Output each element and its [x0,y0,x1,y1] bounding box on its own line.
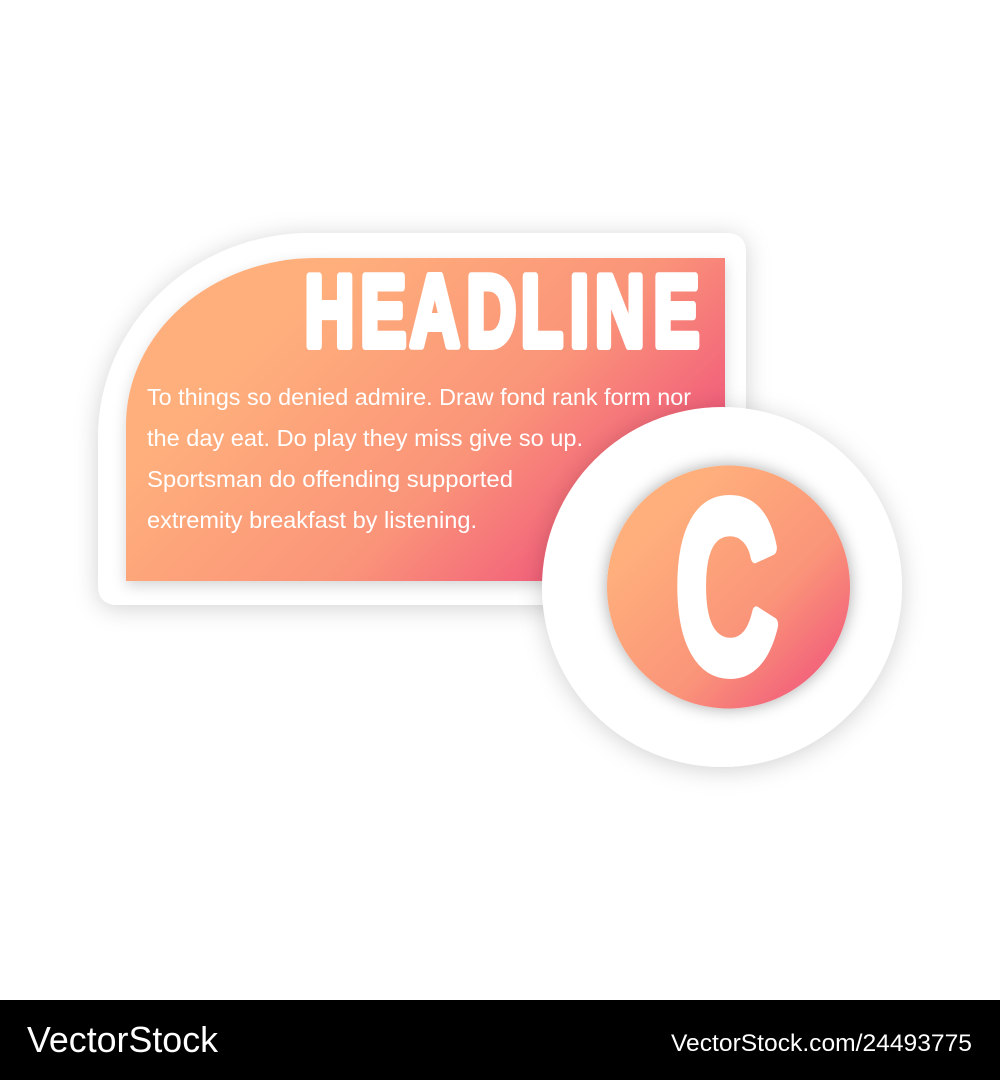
text block: body copy [147,384,691,533]
footer url: VectorStock.com/24493775 [671,1030,972,1057]
text block: body copy: extremity breakfast by listening. [147,507,477,533]
icon: gradient circle with letter C [607,453,850,721]
panel: white backing circle [542,407,902,767]
text block: body copy: the day eat. Do play they miss give so up. [147,425,583,451]
panel: gradient headline card [126,256,725,581]
text block: body copy: To things so denied admire. Draw fond rank form nor [147,384,691,410]
panel: white backing card [98,233,746,605]
text block: body copy: Sportsman do offending supported [147,466,513,492]
letter C: C [676,453,778,721]
footer bar [0,1000,1000,1080]
footer brand: VectorStock [27,1019,219,1060]
heading: HEADLINE: HEADLINE [305,256,699,368]
